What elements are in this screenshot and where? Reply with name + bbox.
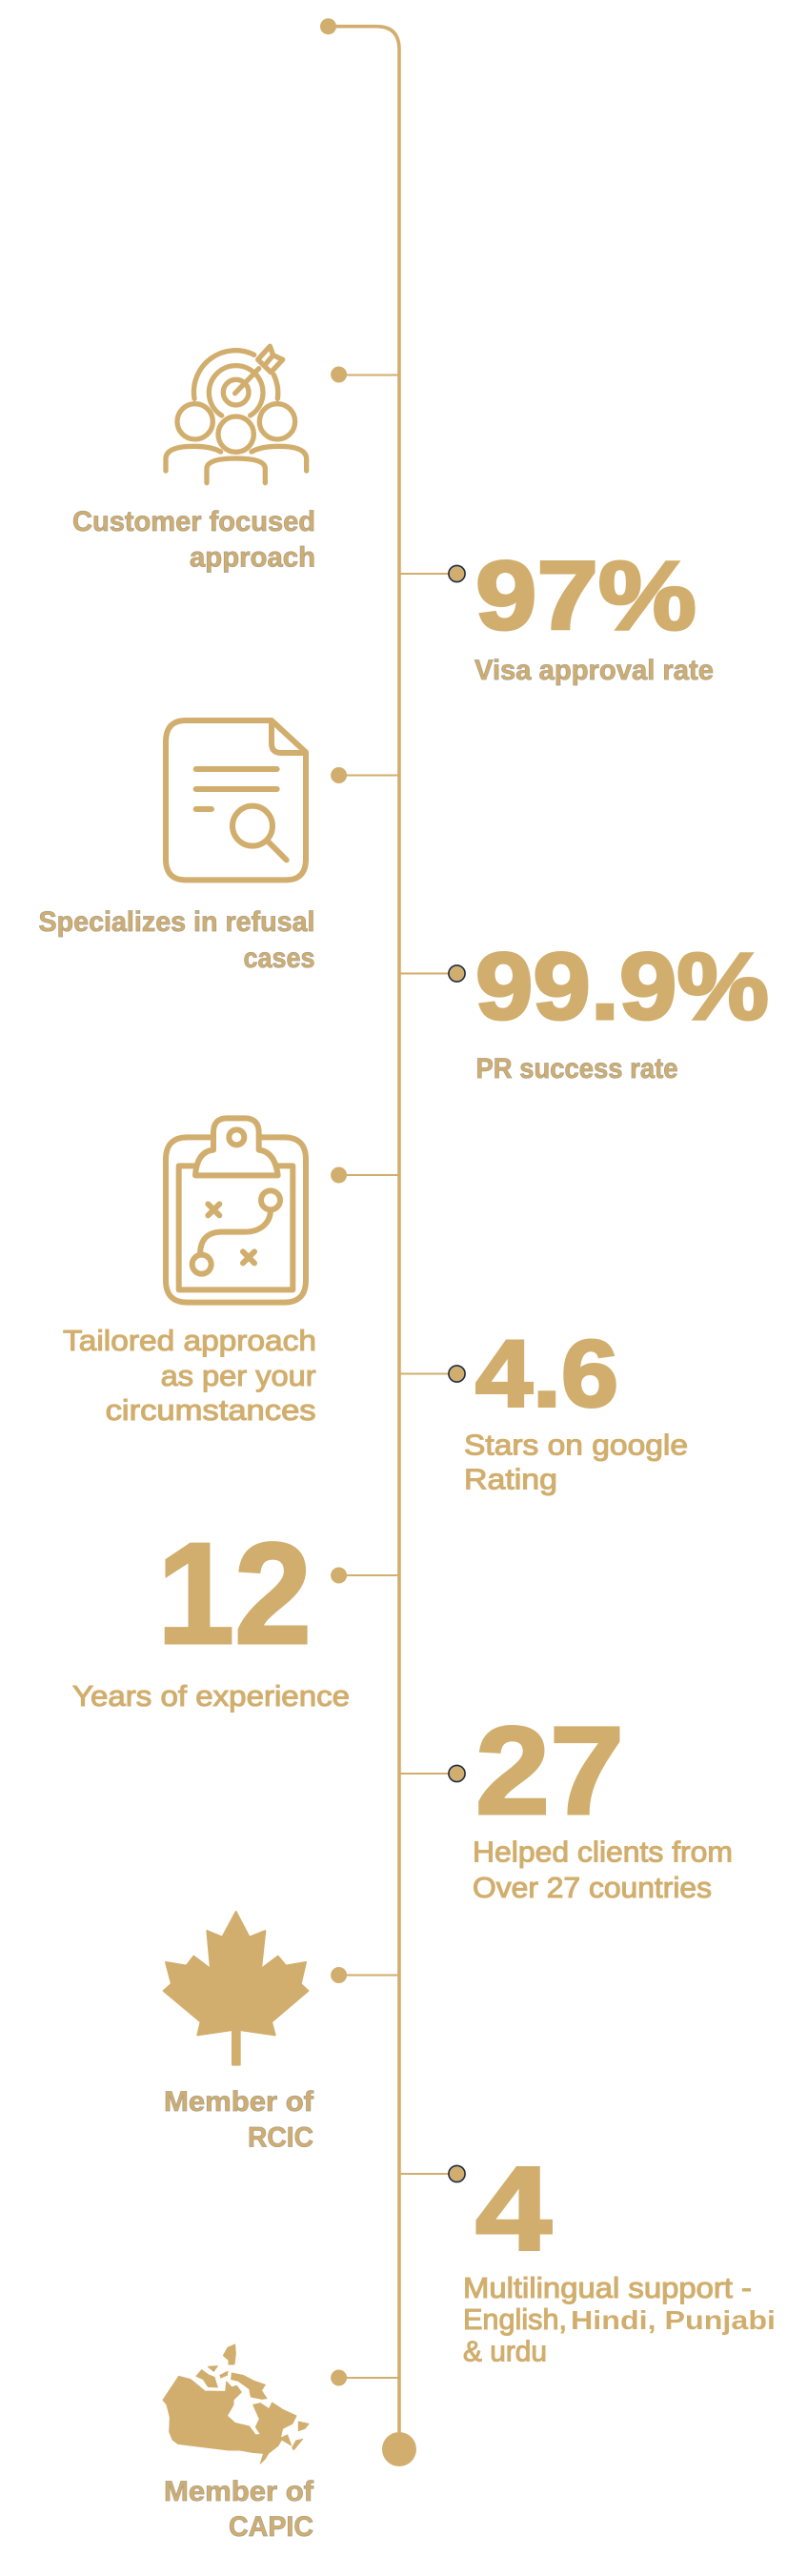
label: member of CAPIC <box>164 2476 314 2543</box>
stat: 97% <box>474 541 714 686</box>
stat: 4 languages: English, <box>463 2302 567 2336</box>
stat: 12 years <box>72 1512 350 1713</box>
stat: 12 years: Years of experience <box>72 1679 350 1713</box>
stat: 27 countries: Over 27 countries <box>473 1871 712 1904</box>
connector: tailored <box>331 1166 399 1184</box>
label: tailored approach: as per your <box>161 1359 316 1392</box>
label: refusal cases: cases <box>244 943 314 974</box>
stat: 99.9%: PR success rate <box>476 1053 678 1085</box>
stat: 4 languages: Multilingual support - <box>463 2271 752 2304</box>
label: member of RCIC: Member of <box>164 2086 314 2118</box>
stat: 97%: Visa approval rate <box>474 655 714 686</box>
connector: 4.6 <box>399 1366 465 1382</box>
connector: customer focused <box>331 366 399 383</box>
stat: 4.6: 4.6 <box>475 1321 618 1426</box>
label: member of RCIC <box>164 2086 314 2154</box>
connector: 97 <box>399 565 465 582</box>
stat: 12 years: 12 <box>157 1512 312 1673</box>
connector: 99.9 <box>399 965 465 982</box>
connector: refusal <box>331 767 399 783</box>
label: customer focused <box>72 506 315 574</box>
label: member of CAPIC: Member of <box>164 2476 314 2507</box>
timeline spine <box>320 18 416 2466</box>
label: customer focused: approach <box>190 541 315 574</box>
connector: RCIC <box>331 1967 399 1983</box>
stat: 4.6 <box>464 1321 688 1496</box>
stat: 27 countries <box>473 1700 733 1904</box>
connector: CAPIC <box>331 2369 399 2386</box>
label: customer focused: Customer focused <box>72 506 315 538</box>
stat: 4 languages: & urdu <box>463 2335 547 2367</box>
icon: maple leaf <box>164 1912 308 2065</box>
icon: map of Canada <box>163 2344 309 2464</box>
stat: 4.6: Rating <box>464 1462 557 1496</box>
connector: 27 <box>399 1765 465 1782</box>
stat: 4 languages: Hindi, Punjabi <box>571 2305 776 2335</box>
label: refusal cases: Specializes in refusal <box>38 906 314 938</box>
label: tailored approach <box>63 1324 316 1427</box>
stat: 27 countries: Helped clients from <box>473 1836 733 1868</box>
icon: target and people <box>166 346 307 483</box>
stat: 4.6: Stars on google <box>464 1428 688 1462</box>
label: refusal cases <box>38 906 314 974</box>
label: tailored approach: Tailored approach <box>63 1324 316 1357</box>
icon: clipboard route <box>166 1118 306 1303</box>
icon: document search <box>166 720 306 880</box>
stat: 97%: 97% <box>475 541 696 650</box>
stat: 27 countries: 27 <box>475 1700 624 1840</box>
label: tailored approach: circumstances <box>106 1393 316 1427</box>
stat: 4 languages <box>463 2142 776 2367</box>
label: member of CAPIC: CAPIC <box>229 2511 313 2543</box>
connector: 12 <box>331 1567 399 1584</box>
stat: 99.9%: 99.9% <box>475 933 769 1039</box>
stat: 4 languages: 4 <box>475 2142 552 2276</box>
label: member of RCIC: RCIC <box>248 2121 313 2154</box>
stat: 99.9% <box>475 933 769 1085</box>
connector: 4 <box>399 2165 465 2182</box>
